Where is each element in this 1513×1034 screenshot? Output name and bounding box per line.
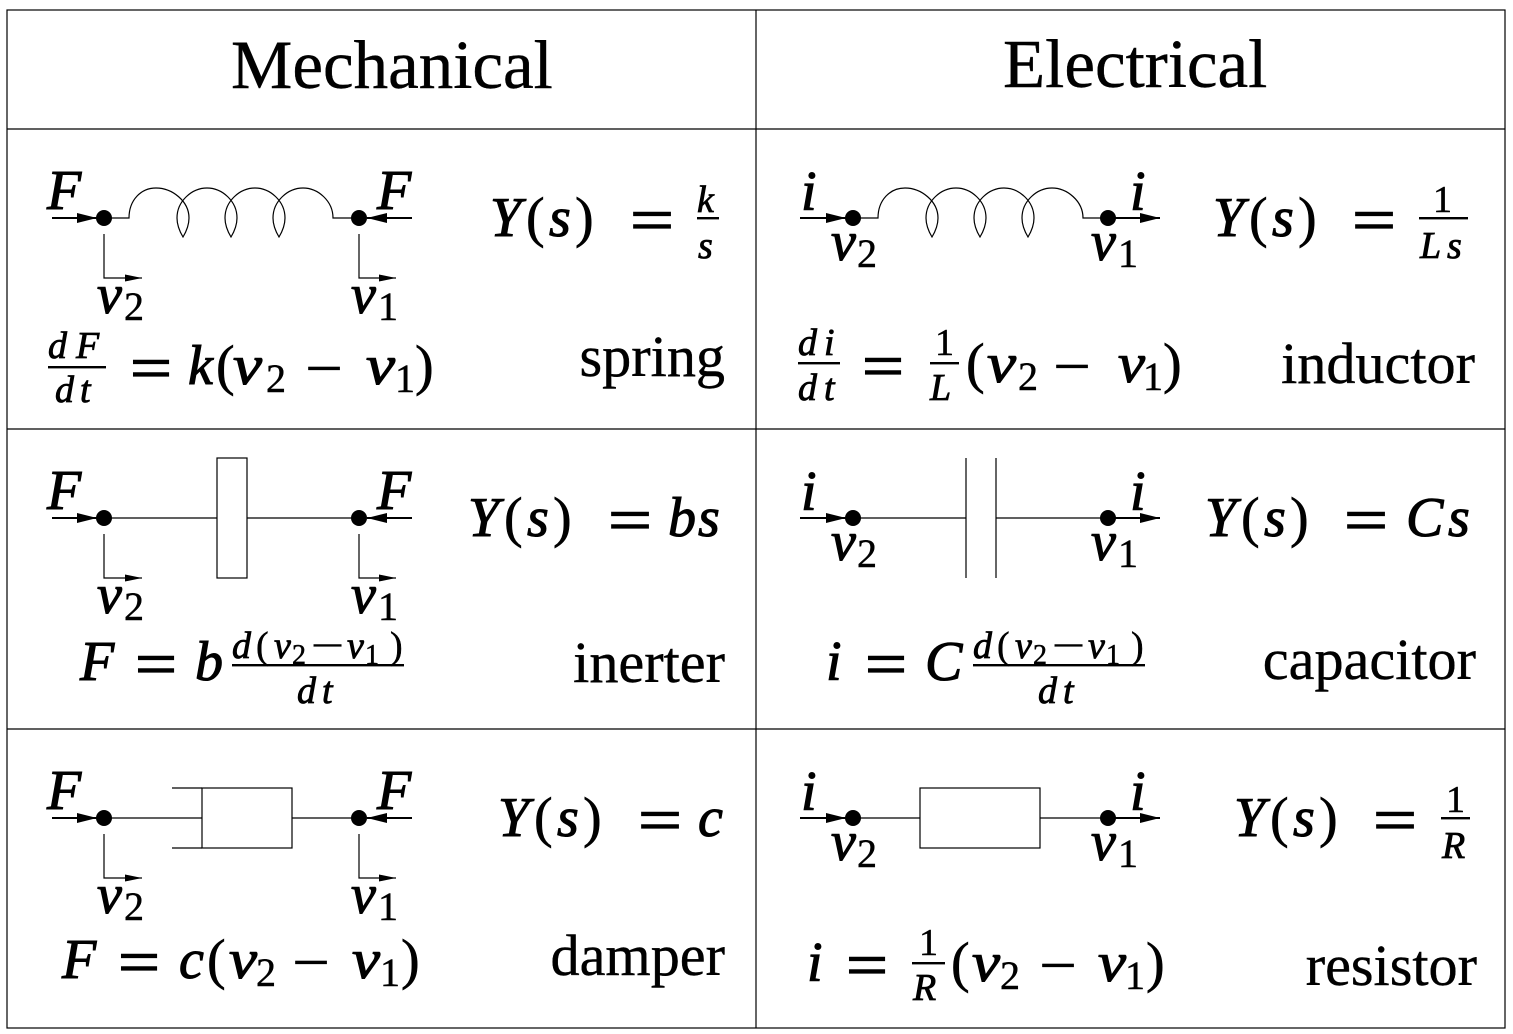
panel: spring — [46, 160, 725, 411]
fraction 1 over Ls: s — [1447, 225, 1462, 267]
panel: inerter — [46, 458, 725, 712]
resistor diagram — [800, 761, 1160, 876]
capacitor equation: C — [925, 631, 963, 693]
resistor equation: ) — [1146, 932, 1165, 994]
inductor equation: v — [987, 333, 1016, 395]
inductor diagram: i — [1130, 161, 1146, 223]
inductor diagram: v — [1091, 211, 1116, 273]
label: inerter: inerter — [573, 630, 725, 695]
capacitor equation: 1 — [1106, 640, 1120, 671]
inerter equation: ( — [256, 625, 269, 667]
equals: = — [1352, 187, 1396, 255]
inductor equation: i — [824, 322, 835, 364]
damper admittance: ( — [534, 787, 553, 849]
inductor admittance: Y — [1213, 187, 1250, 249]
capacitor admittance: s — [1264, 487, 1286, 549]
resistor diagram: 2 — [857, 831, 877, 876]
spring admittance: s — [549, 187, 571, 249]
resistor equation: v — [1098, 932, 1126, 994]
inerter diagram: v — [351, 564, 376, 626]
resistor admittance: ) — [1319, 787, 1338, 849]
inerter admittance: Y — [468, 487, 505, 549]
inductor admittance: ( — [1249, 187, 1268, 249]
damper diagram — [46, 760, 412, 929]
spring equation: d — [55, 369, 75, 411]
spring diagram: 2 — [124, 284, 144, 329]
inductor equation: t — [824, 367, 836, 409]
label: damper: damper — [551, 923, 725, 988]
damper admittance: ) — [583, 787, 602, 849]
damper diagram: 1 — [378, 884, 398, 929]
inerter diagram: 2 — [124, 584, 144, 629]
inductor diagram: 2 — [857, 231, 877, 276]
damper equation: − — [292, 929, 330, 997]
spring equation — [48, 325, 434, 411]
fraction 1 over Ls — [1419, 179, 1468, 267]
damper equation: 2 — [256, 950, 276, 995]
capacitor equation: v — [1088, 625, 1105, 667]
label: inductor: inductor — [1281, 331, 1475, 396]
value bs: s — [698, 487, 720, 549]
equals: = — [630, 187, 674, 255]
capacitor equation: i — [826, 631, 842, 693]
spring equation: k — [188, 335, 214, 397]
inerter diagram: F — [46, 460, 82, 522]
resistor diagram: v — [831, 811, 856, 873]
fraction 1 over R: 1 — [1446, 779, 1465, 821]
value Cs: s — [1448, 487, 1470, 549]
spring admittance: ) — [575, 187, 594, 249]
capacitor admittance: ) — [1290, 487, 1309, 549]
resistor diagram: i — [801, 761, 817, 823]
value c: c — [698, 787, 723, 849]
inductor equation: L — [929, 367, 951, 409]
capacitor diagram: 2 — [857, 531, 877, 576]
damper diagram: 2 — [124, 884, 144, 929]
capacitor equation: v — [1015, 625, 1032, 667]
resistor equation: i — [807, 932, 823, 994]
inerter diagram — [46, 458, 412, 629]
inerter equation: 2 — [292, 640, 306, 671]
inerter admittance: s — [527, 487, 549, 549]
spring equation: 2 — [266, 356, 286, 401]
damper equation: = — [118, 929, 160, 997]
fraction k over s: k — [697, 179, 715, 221]
resistor equation: v — [972, 932, 1000, 994]
inerter equation: F — [79, 631, 115, 693]
damper diagram: v — [97, 864, 122, 926]
inductor equation — [798, 322, 1182, 409]
inerter equation: t — [322, 670, 334, 712]
capacitor diagram: i — [1130, 461, 1146, 523]
spring equation: = — [130, 335, 172, 403]
capacitor equation: ) — [1131, 625, 1144, 667]
capacitor equation: ( — [997, 625, 1010, 667]
resistor admittance: ( — [1270, 787, 1289, 849]
resistor equation: − — [1039, 932, 1077, 1000]
capacitor equation — [826, 625, 1145, 712]
panel: inductor — [798, 161, 1475, 409]
damper equation: c — [179, 929, 204, 991]
fraction k over s: s — [698, 225, 713, 267]
panel: resistor — [800, 761, 1477, 1009]
inductor equation: ) — [1163, 333, 1182, 395]
spring equation: ( — [216, 335, 235, 397]
spring diagram: 1 — [378, 284, 398, 329]
inerter equation: d — [297, 670, 317, 712]
label: resistor: resistor — [1306, 933, 1477, 998]
resistor equation: = — [846, 932, 888, 1000]
resistor equation: 1 — [1125, 953, 1145, 998]
inductor diagram: 1 — [1118, 231, 1138, 276]
spring equation: 1 — [395, 356, 415, 401]
fraction 1 over R: R — [1441, 825, 1465, 867]
inerter diagram: 1 — [378, 584, 398, 629]
capacitor equation: = — [865, 631, 907, 699]
inductor equation: 1 — [935, 322, 954, 364]
damper admittance: Y — [498, 787, 535, 849]
inerter equation: = — [135, 631, 177, 699]
inerter equation: v — [274, 625, 291, 667]
heading: Electrical: Electrical — [1003, 26, 1267, 102]
resistor equation — [807, 922, 1165, 1009]
damper equation: F — [61, 929, 97, 991]
inductor diagram: i — [801, 161, 817, 223]
resistor equation: 1 — [919, 922, 938, 964]
damper equation: 1 — [380, 950, 400, 995]
spring diagram: v — [351, 264, 376, 326]
value Cs: C — [1406, 487, 1444, 549]
inductor equation: ( — [966, 333, 985, 395]
inductor equation: d — [798, 367, 818, 409]
spring admittance: ( — [526, 187, 545, 249]
capacitor diagram: v — [1091, 511, 1116, 573]
inductor equation: 1 — [1143, 354, 1163, 399]
spring equation: d — [48, 325, 68, 367]
spring diagram: F — [46, 160, 82, 222]
equals: = — [1373, 787, 1417, 855]
label: spring: spring — [580, 324, 725, 389]
inductor equation: − — [1053, 333, 1091, 401]
inerter equation — [79, 625, 404, 712]
inductor equation: = — [862, 333, 904, 401]
heading: Mechanical: Mechanical — [231, 27, 553, 103]
damper admittance: s — [557, 787, 579, 849]
capacitor equation: d — [973, 625, 993, 667]
spring diagram: v — [97, 264, 122, 326]
damper diagram: F — [376, 760, 412, 822]
inerter equation: b — [195, 631, 223, 693]
capacitor equation: 2 — [1033, 640, 1047, 671]
inerter diagram: v — [97, 564, 122, 626]
resistor admittance: s — [1293, 787, 1315, 849]
damper equation: v — [352, 929, 380, 991]
inerter equation: 1 — [365, 640, 379, 671]
capacitor equation: t — [1063, 670, 1075, 712]
inductor equation: 2 — [1018, 354, 1038, 399]
resistor diagram: 1 — [1118, 831, 1138, 876]
capacitor equation: − — [1052, 625, 1085, 667]
damper equation — [61, 929, 420, 997]
fraction k over s — [697, 179, 719, 267]
capacitor diagram — [800, 458, 1160, 578]
inductor admittance: ) — [1298, 187, 1317, 249]
equals: = — [608, 487, 652, 555]
fraction 1 over Ls: 1 — [1433, 179, 1452, 221]
spring equation: t — [80, 369, 92, 411]
capacitor diagram: 1 — [1118, 531, 1138, 576]
spring diagram: F — [376, 160, 412, 222]
damper equation: ( — [207, 929, 226, 991]
panel: damper — [46, 760, 725, 997]
inductor equation: d — [798, 322, 818, 364]
fraction 1 over Ls: L — [1419, 225, 1441, 267]
spring equation: v — [366, 335, 395, 397]
spring equation: F — [75, 325, 100, 367]
damper equation: ) — [401, 929, 420, 991]
equals: = — [638, 787, 682, 855]
inerter equation: v — [347, 625, 364, 667]
capacitor admittance: ( — [1241, 487, 1260, 549]
resistor diagram: v — [1091, 811, 1116, 873]
resistor equation: 2 — [1000, 953, 1020, 998]
capacitor admittance: Y — [1205, 487, 1242, 549]
inerter admittance: ) — [553, 487, 572, 549]
resistor admittance: Y — [1234, 787, 1271, 849]
spring equation: v — [233, 335, 262, 397]
inductor admittance: s — [1272, 187, 1294, 249]
resistor equation: ( — [951, 932, 970, 994]
spring equation: ) — [415, 335, 434, 397]
spring equation: − — [305, 335, 343, 403]
inerter admittance: ( — [504, 487, 523, 549]
inductor equation: v — [1118, 333, 1145, 395]
inductor diagram — [800, 161, 1160, 276]
capacitor diagram: i — [801, 461, 817, 523]
inerter equation: − — [311, 625, 344, 667]
capacitor diagram: v — [831, 511, 856, 573]
inerter diagram: F — [376, 460, 412, 522]
spring admittance: Y — [490, 187, 527, 249]
equals: = — [1344, 487, 1388, 555]
damper diagram: v — [351, 864, 376, 926]
capacitor equation: d — [1038, 670, 1058, 712]
panel: capacitor — [800, 458, 1476, 712]
value bs: b — [668, 487, 696, 549]
inerter equation: d — [232, 625, 252, 667]
damper equation: v — [229, 929, 257, 991]
fraction 1 over R — [1441, 779, 1470, 867]
spring diagram — [46, 160, 412, 329]
resistor equation: R — [912, 967, 936, 1009]
label: capacitor: capacitor — [1263, 627, 1476, 692]
resistor diagram: i — [1130, 761, 1146, 823]
damper diagram: F — [46, 760, 82, 822]
inerter equation: ) — [390, 625, 403, 667]
inductor diagram: v — [831, 211, 856, 273]
